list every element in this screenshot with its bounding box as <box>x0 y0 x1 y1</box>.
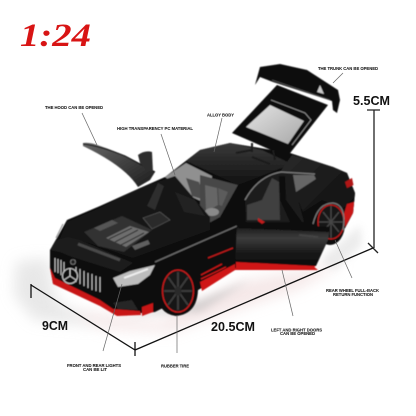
dimension: height 5.5CM <box>353 94 390 253</box>
rear quarter window <box>293 175 316 192</box>
spoiler trim line <box>272 80 330 100</box>
engine bay <box>58 176 210 258</box>
dimension: width 9CM <box>31 284 135 356</box>
callout: lights: FRONT AND REAR LIGHTS <box>67 363 121 368</box>
door sill pillar <box>279 176 302 222</box>
roof panel <box>186 143 292 185</box>
callout: trunk: THE TRUNK CAN BE OPENED <box>318 66 378 71</box>
windshield <box>165 163 212 206</box>
front hood lip <box>50 237 133 272</box>
car main body <box>50 143 355 315</box>
red side skirt <box>200 264 318 291</box>
hood lip highlight <box>78 244 120 260</box>
engine cover <box>84 183 205 252</box>
interior seats <box>205 185 228 216</box>
callout: rear wheel: RETURN FUNCTION <box>333 292 373 297</box>
star emblem <box>62 260 78 284</box>
open hood <box>83 143 155 187</box>
front fender red stripes <box>201 264 226 279</box>
rear wheel <box>313 203 345 245</box>
tail light <box>345 178 354 188</box>
callout: hood <box>45 105 103 145</box>
headlight glint <box>124 269 148 278</box>
left fender highlight <box>56 224 63 238</box>
side mirror <box>138 151 153 172</box>
front fender red accent <box>142 303 153 316</box>
headlight <box>113 265 155 287</box>
rear hatch frame <box>232 85 328 157</box>
callout: trunk <box>318 66 378 83</box>
callout: hood: THE HOOD CAN BE OPENED <box>45 105 103 110</box>
callout: alloy body: ALLOY BODY <box>207 112 234 118</box>
callout: transparent material: HIGH TRANSPARENCY PC MATERIAL <box>117 126 193 131</box>
side air vent <box>208 248 233 258</box>
car front face <box>50 250 160 315</box>
open door <box>235 218 330 269</box>
roof door arc trim <box>245 172 315 200</box>
rear hatch window <box>246 105 304 144</box>
body top highlight <box>155 226 237 262</box>
callout: rear wheel <box>326 240 380 297</box>
car floor shadow <box>14 225 362 332</box>
callout: alloy body <box>207 112 234 152</box>
windshield seats <box>186 178 205 200</box>
side window and interior <box>200 175 238 228</box>
dimension: width 9CM: 9CM <box>42 319 68 333</box>
dimension: height 5.5CM: 5.5CM <box>353 94 390 108</box>
callout: lights <box>67 284 122 372</box>
hatch glass edge <box>271 100 311 145</box>
car model <box>50 64 355 316</box>
front red splitter <box>50 268 141 316</box>
hatch hinges <box>236 143 275 164</box>
radiator grille <box>52 257 103 293</box>
callout: doors: CAN BE OPENED <box>280 331 315 336</box>
dimension: length 20.5CM <box>135 248 373 350</box>
rear red diffuser <box>343 202 354 227</box>
lower bumper vent <box>113 300 138 310</box>
callout: doors: LEFT AND RIGHT DOORS <box>271 328 322 332</box>
callout: lights: CAN BE LIT <box>83 367 107 372</box>
dimension: length 20.5CM: 20.5CM <box>211 320 255 334</box>
body side before door <box>133 222 237 290</box>
driver seat <box>247 178 280 220</box>
spoiler inner highlight <box>317 85 324 94</box>
rear fender <box>280 155 355 228</box>
callout: transparent material <box>117 126 193 175</box>
rear spoiler <box>255 64 340 113</box>
callout: doors <box>271 270 322 336</box>
front wheel <box>155 265 198 316</box>
callout: tire <box>161 316 189 368</box>
title: scale 1:24: 1:24 <box>20 18 91 54</box>
door opening interior <box>245 172 304 222</box>
callout: tire: RUBBER TIRE <box>161 364 189 368</box>
callout: rear wheel: REAR WHEEL FULL-BACK <box>326 288 380 293</box>
